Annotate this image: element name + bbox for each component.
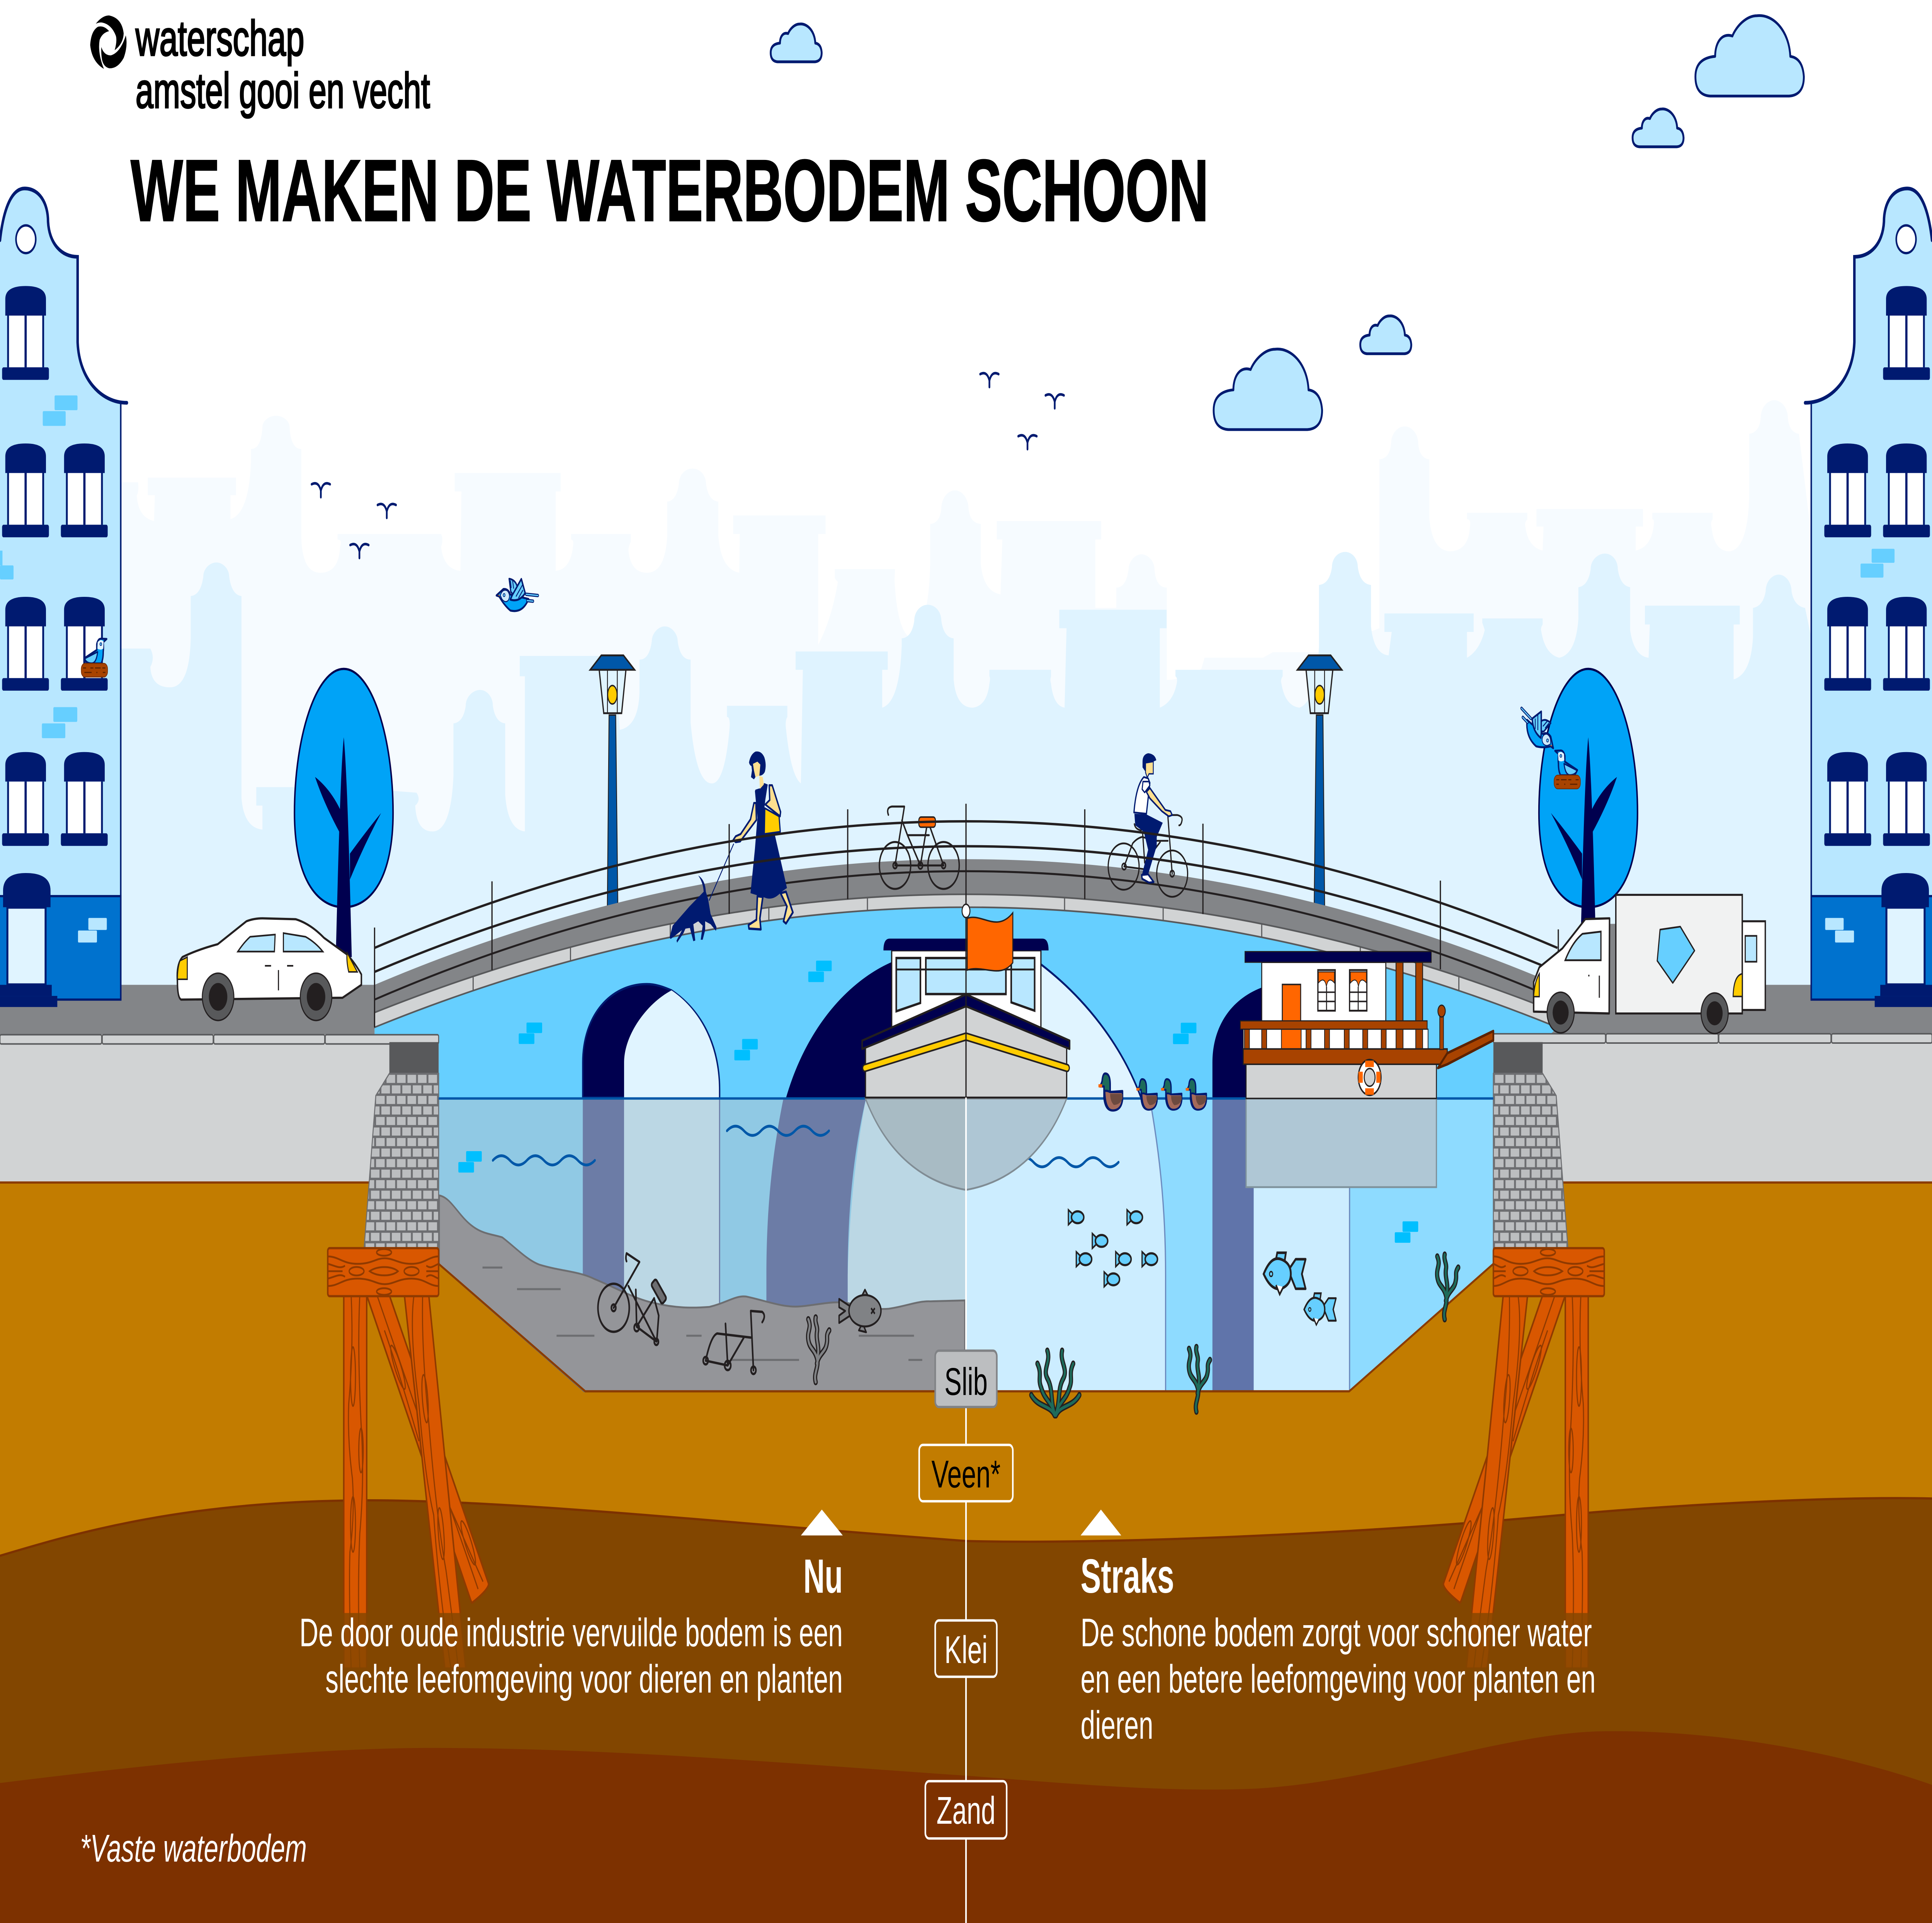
yellow bag	[764, 808, 780, 834]
cloud small middle	[1360, 316, 1411, 354]
icon: flying blue bird left	[497, 565, 538, 626]
sunken bicycle 1	[598, 1253, 667, 1345]
skyline: near buildings	[121, 552, 1811, 998]
label: Klei: Klei	[944, 1628, 988, 1672]
cabin	[892, 950, 1041, 1035]
cyclist	[1108, 753, 1188, 897]
nesting bird in right tree	[1554, 751, 1580, 789]
flag pole top	[962, 904, 970, 917]
navy deck band	[862, 994, 1070, 1049]
road left	[0, 985, 374, 1035]
house right	[1805, 189, 1932, 1007]
shoal of small fish	[1068, 1210, 1158, 1287]
bridge deck	[374, 859, 1558, 1027]
waterline	[439, 1098, 1493, 1099]
woman legs	[748, 892, 793, 929]
neck and face	[753, 762, 764, 789]
footnote: *Vaste waterbodem	[80, 1827, 307, 1870]
woman left arm	[733, 803, 757, 842]
veranda posts	[1396, 962, 1423, 1049]
cloud top right	[1696, 15, 1804, 96]
gangway	[1438, 1031, 1493, 1068]
tree right	[1539, 669, 1638, 957]
balustrade rail	[1240, 1021, 1427, 1029]
sludge dashes	[483, 1267, 922, 1360]
wooden foundation left	[328, 1248, 488, 1668]
brick accents on bridge	[519, 961, 1196, 1060]
label: Zand	[925, 1781, 1007, 1838]
balustrade	[1243, 1029, 1428, 1050]
soil layer: veen	[0, 1182, 1932, 1923]
sleeve	[1142, 781, 1150, 793]
hull	[866, 1003, 1067, 1097]
seaweed large	[1031, 1351, 1079, 1415]
text block: nu: De door oude industrie vervuilde bodem is een	[299, 1610, 843, 1655]
soil layer: zand	[0, 1731, 1932, 1923]
lifebuoy	[1358, 1060, 1381, 1095]
brick pier left	[364, 1042, 439, 1248]
hull under water	[866, 1099, 966, 1190]
bridge face above water	[374, 907, 1558, 1099]
canal bed line	[439, 1264, 1493, 1391]
mooring post	[1438, 1005, 1445, 1050]
kerb left	[0, 1035, 439, 1044]
woman walking with dog	[670, 751, 793, 943]
face	[1146, 762, 1153, 778]
arrow: nu	[801, 1510, 843, 1536]
quay wall right	[1538, 1042, 1932, 1182]
cloud top centre	[771, 24, 821, 62]
wooden foundation right	[1444, 1248, 1604, 1668]
cabin windows	[1318, 970, 1367, 1011]
lamp post left	[590, 656, 634, 937]
title: WE MAKEN DE WATERBODEM SCHOON	[131, 141, 1209, 240]
logo wordmark: amstel gooi en vecht	[136, 63, 430, 119]
parked bicycle on bridge	[879, 807, 959, 889]
tree left	[294, 669, 393, 957]
dog	[670, 875, 716, 943]
cabin roof	[883, 939, 1049, 950]
brick accents underwater	[458, 1151, 1418, 1243]
quay wall left	[0, 1042, 394, 1182]
text block: straks	[1081, 1549, 1595, 1747]
text block: nu	[299, 1549, 843, 1701]
sludge layer	[439, 1196, 965, 1391]
work boat	[862, 904, 1070, 1190]
arch: left	[583, 984, 719, 1097]
icon: flying bird feeding	[1522, 708, 1553, 748]
birds group middle	[980, 373, 1064, 449]
ducks	[1099, 1074, 1206, 1111]
logo	[90, 11, 430, 119]
text block: nu: Nu	[803, 1549, 843, 1603]
logo wordmark: waterschap	[135, 11, 304, 66]
big fish	[1264, 1253, 1306, 1294]
road right	[1528, 985, 1932, 1035]
leash	[709, 844, 734, 900]
seaweed right	[1437, 1255, 1458, 1319]
cloud large middle	[1214, 349, 1322, 430]
text block: nu: slechte leefomgeving voor dieren en planten	[325, 1656, 843, 1701]
shirt	[1134, 777, 1150, 814]
bicycle	[1108, 815, 1188, 897]
ground edge line	[0, 1182, 1932, 1183]
flag	[967, 913, 1013, 971]
cabin	[1262, 962, 1386, 1025]
second big fish	[1304, 1293, 1336, 1325]
text block: straks: en een betere leefomgeving voor planten en	[1081, 1656, 1595, 1701]
hair	[1143, 753, 1156, 771]
text block: straks: De schone bodem zorgt voor schoner water	[1081, 1610, 1592, 1655]
birds group left	[311, 483, 396, 558]
cloud small right	[1633, 109, 1684, 147]
hair	[749, 751, 766, 780]
houseboat	[1240, 951, 1493, 1187]
brick pier right	[1493, 1042, 1568, 1248]
deck	[1243, 1049, 1447, 1064]
label: Veen	[919, 1445, 1013, 1501]
houseboat hull	[1246, 1064, 1436, 1099]
roof	[1245, 951, 1431, 962]
text block: straks: dieren	[1081, 1703, 1153, 1747]
woman dress	[750, 783, 787, 899]
soil layer: klei	[0, 1498, 1932, 1923]
arrow: straks	[1081, 1510, 1121, 1536]
seaweed middle	[1189, 1347, 1210, 1412]
houseboat hull under water	[1246, 1099, 1436, 1187]
underwater: now side	[439, 1099, 965, 1308]
sunken bicycle 2	[703, 1311, 764, 1374]
label: Zand: Zand	[937, 1789, 995, 1832]
skyline: far buildings	[121, 400, 1811, 998]
label: Klei	[935, 1621, 997, 1677]
underwater: later side	[961, 1097, 1493, 1393]
arm	[1146, 788, 1172, 816]
lamp post right	[1298, 656, 1342, 937]
delivery truck	[1534, 895, 1765, 1034]
ripples	[493, 1126, 1395, 1167]
logo wordmark	[135, 11, 430, 119]
shoe	[1142, 874, 1154, 883]
arch: right	[1213, 987, 1264, 1097]
label: Slib	[935, 1351, 997, 1407]
logo icon	[90, 15, 126, 69]
kerb right	[1493, 1034, 1932, 1043]
dead fish	[839, 1290, 881, 1332]
yellow stripe	[865, 1036, 1067, 1068]
house left	[0, 189, 127, 1007]
seaweed in sludge	[808, 1317, 829, 1382]
arch: centre	[786, 961, 1141, 1097]
text block: straks: Straks	[1081, 1549, 1174, 1603]
pants	[1134, 814, 1163, 874]
bridge railing	[374, 804, 1558, 1027]
label: Veen: Veen*	[932, 1453, 1000, 1496]
label: Slib: Slib	[944, 1361, 988, 1404]
woman right arm	[765, 785, 781, 816]
car	[177, 918, 361, 1021]
